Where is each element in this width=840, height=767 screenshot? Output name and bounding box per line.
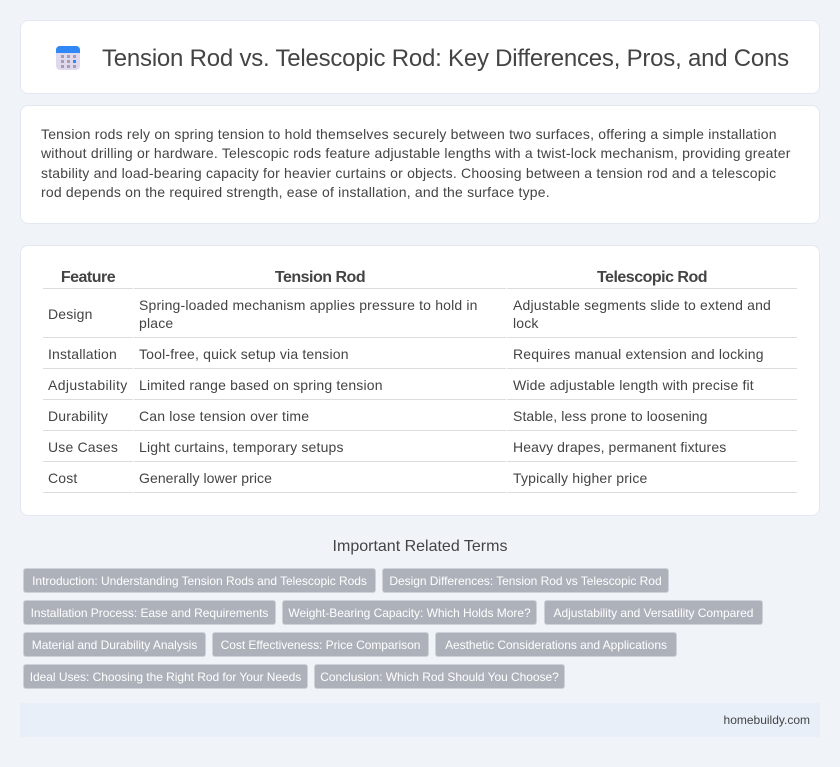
row: Use Cases: Use Cases: [48, 439, 118, 455]
row: Adjustability: Adjustability: [48, 377, 128, 393]
icon: calendar: [56, 46, 80, 70]
tag: [212, 632, 429, 657]
Use Cases: Tension Rod: Light curtains, temporary setups: [139, 439, 344, 455]
Design: Tension Rod: [139, 297, 478, 331]
Adjustability: Telescopic Rod: Wide adjustable length with precise fit: [513, 377, 754, 393]
row: Durability: Durability: [48, 408, 108, 424]
tag: [382, 568, 669, 593]
Design: Telescopic Rod: lock: [513, 315, 539, 331]
tag: Adjustability and Versatility Compared: [554, 606, 753, 620]
tag: [23, 568, 376, 593]
tag: [314, 664, 565, 689]
Adjustability: Tension Rod: Limited range based on spring tension: [139, 377, 383, 393]
description text: [41, 126, 791, 200]
table heading: Feature: Feature: [61, 269, 115, 286]
row: Cost: Cost: [48, 470, 77, 486]
tag: [544, 600, 763, 625]
Design: Tension Rod: Spring-loaded mechanism applies pressure to hold in: [139, 297, 478, 313]
table heading: Tension Rod: Tension Rod: [275, 269, 365, 286]
tag group: related terms: [23, 568, 763, 689]
tag: Conclusion: Which Rod Should You Choose?: [320, 670, 559, 684]
header panel: [20, 20, 820, 94]
Installation: Tension Rod: Tool-free, quick setup via tension: [139, 346, 349, 362]
tag: Aesthetic Considerations and Applications: [445, 638, 667, 652]
description text: stability and load-bearing capacity for heavier curtains or objects. Choosing between a tension rod and a telescopic: [41, 165, 776, 181]
description text: without drilling or hardware. Telescopic rods feature adjustable lengths with a twist-lock mechanism, providing greater: [41, 145, 791, 161]
tag: [23, 600, 276, 625]
tag: Cost Effectiveness: Price Comparison: [221, 638, 420, 652]
tag: Weight-Bearing Capacity: Which Holds More?: [288, 606, 531, 620]
Cost: Telescopic Rod: Typically higher price: [513, 470, 647, 486]
Durability: Tension Rod: Can lose tension over time: [139, 408, 309, 424]
Cost: Tension Rod: Generally lower price: [139, 470, 272, 486]
tag: Material and Durability Analysis: [32, 638, 197, 652]
tag: [282, 600, 537, 625]
tag: [23, 664, 308, 689]
description text: rod depends on the required strength, ease of installation, and the surface type.: [41, 184, 550, 200]
tag: [23, 632, 206, 657]
tag: Installation Process: Ease and Requirements: [31, 606, 268, 620]
Durability: Telescopic Rod: Stable, less prone to loosening: [513, 408, 708, 424]
Design: Telescopic Rod: [513, 297, 771, 331]
Installation: Telescopic Rod: Requires manual extension and locking: [513, 346, 764, 362]
Use Cases: Telescopic Rod: Heavy drapes, permanent fixtures: [513, 439, 726, 455]
Design: Tension Rod: place: [139, 315, 173, 331]
row: Installation: Installation: [48, 346, 117, 362]
footer bar: [20, 703, 820, 737]
table heading: Telescopic Rod: Telescopic Rod: [597, 269, 707, 286]
row: Design: Design: [48, 306, 93, 322]
Design: Telescopic Rod: Adjustable segments slide to extend and: [513, 297, 771, 313]
panel: comparison table: [20, 245, 820, 516]
section heading: related terms: Important Related Terms: [333, 538, 507, 555]
tag: Introduction: Understanding Tension Rods and Telescopic Rods: [32, 574, 367, 588]
footer: source: homebuildy.com: [724, 713, 810, 727]
title: Tension Rod vs. Telescopic Rod: Key Differences, Pros, and Cons: [102, 45, 789, 72]
tag: Ideal Uses: Choosing the Right Rod for Your Needs: [30, 670, 301, 684]
description panel: [20, 105, 820, 224]
description text: Tension rods rely on spring tension to hold themselves securely between two surfaces, offering a simple installation: [41, 126, 777, 142]
tag: Design Differences: Tension Rod vs Telescopic Rod: [389, 574, 662, 588]
tag: [435, 632, 677, 657]
